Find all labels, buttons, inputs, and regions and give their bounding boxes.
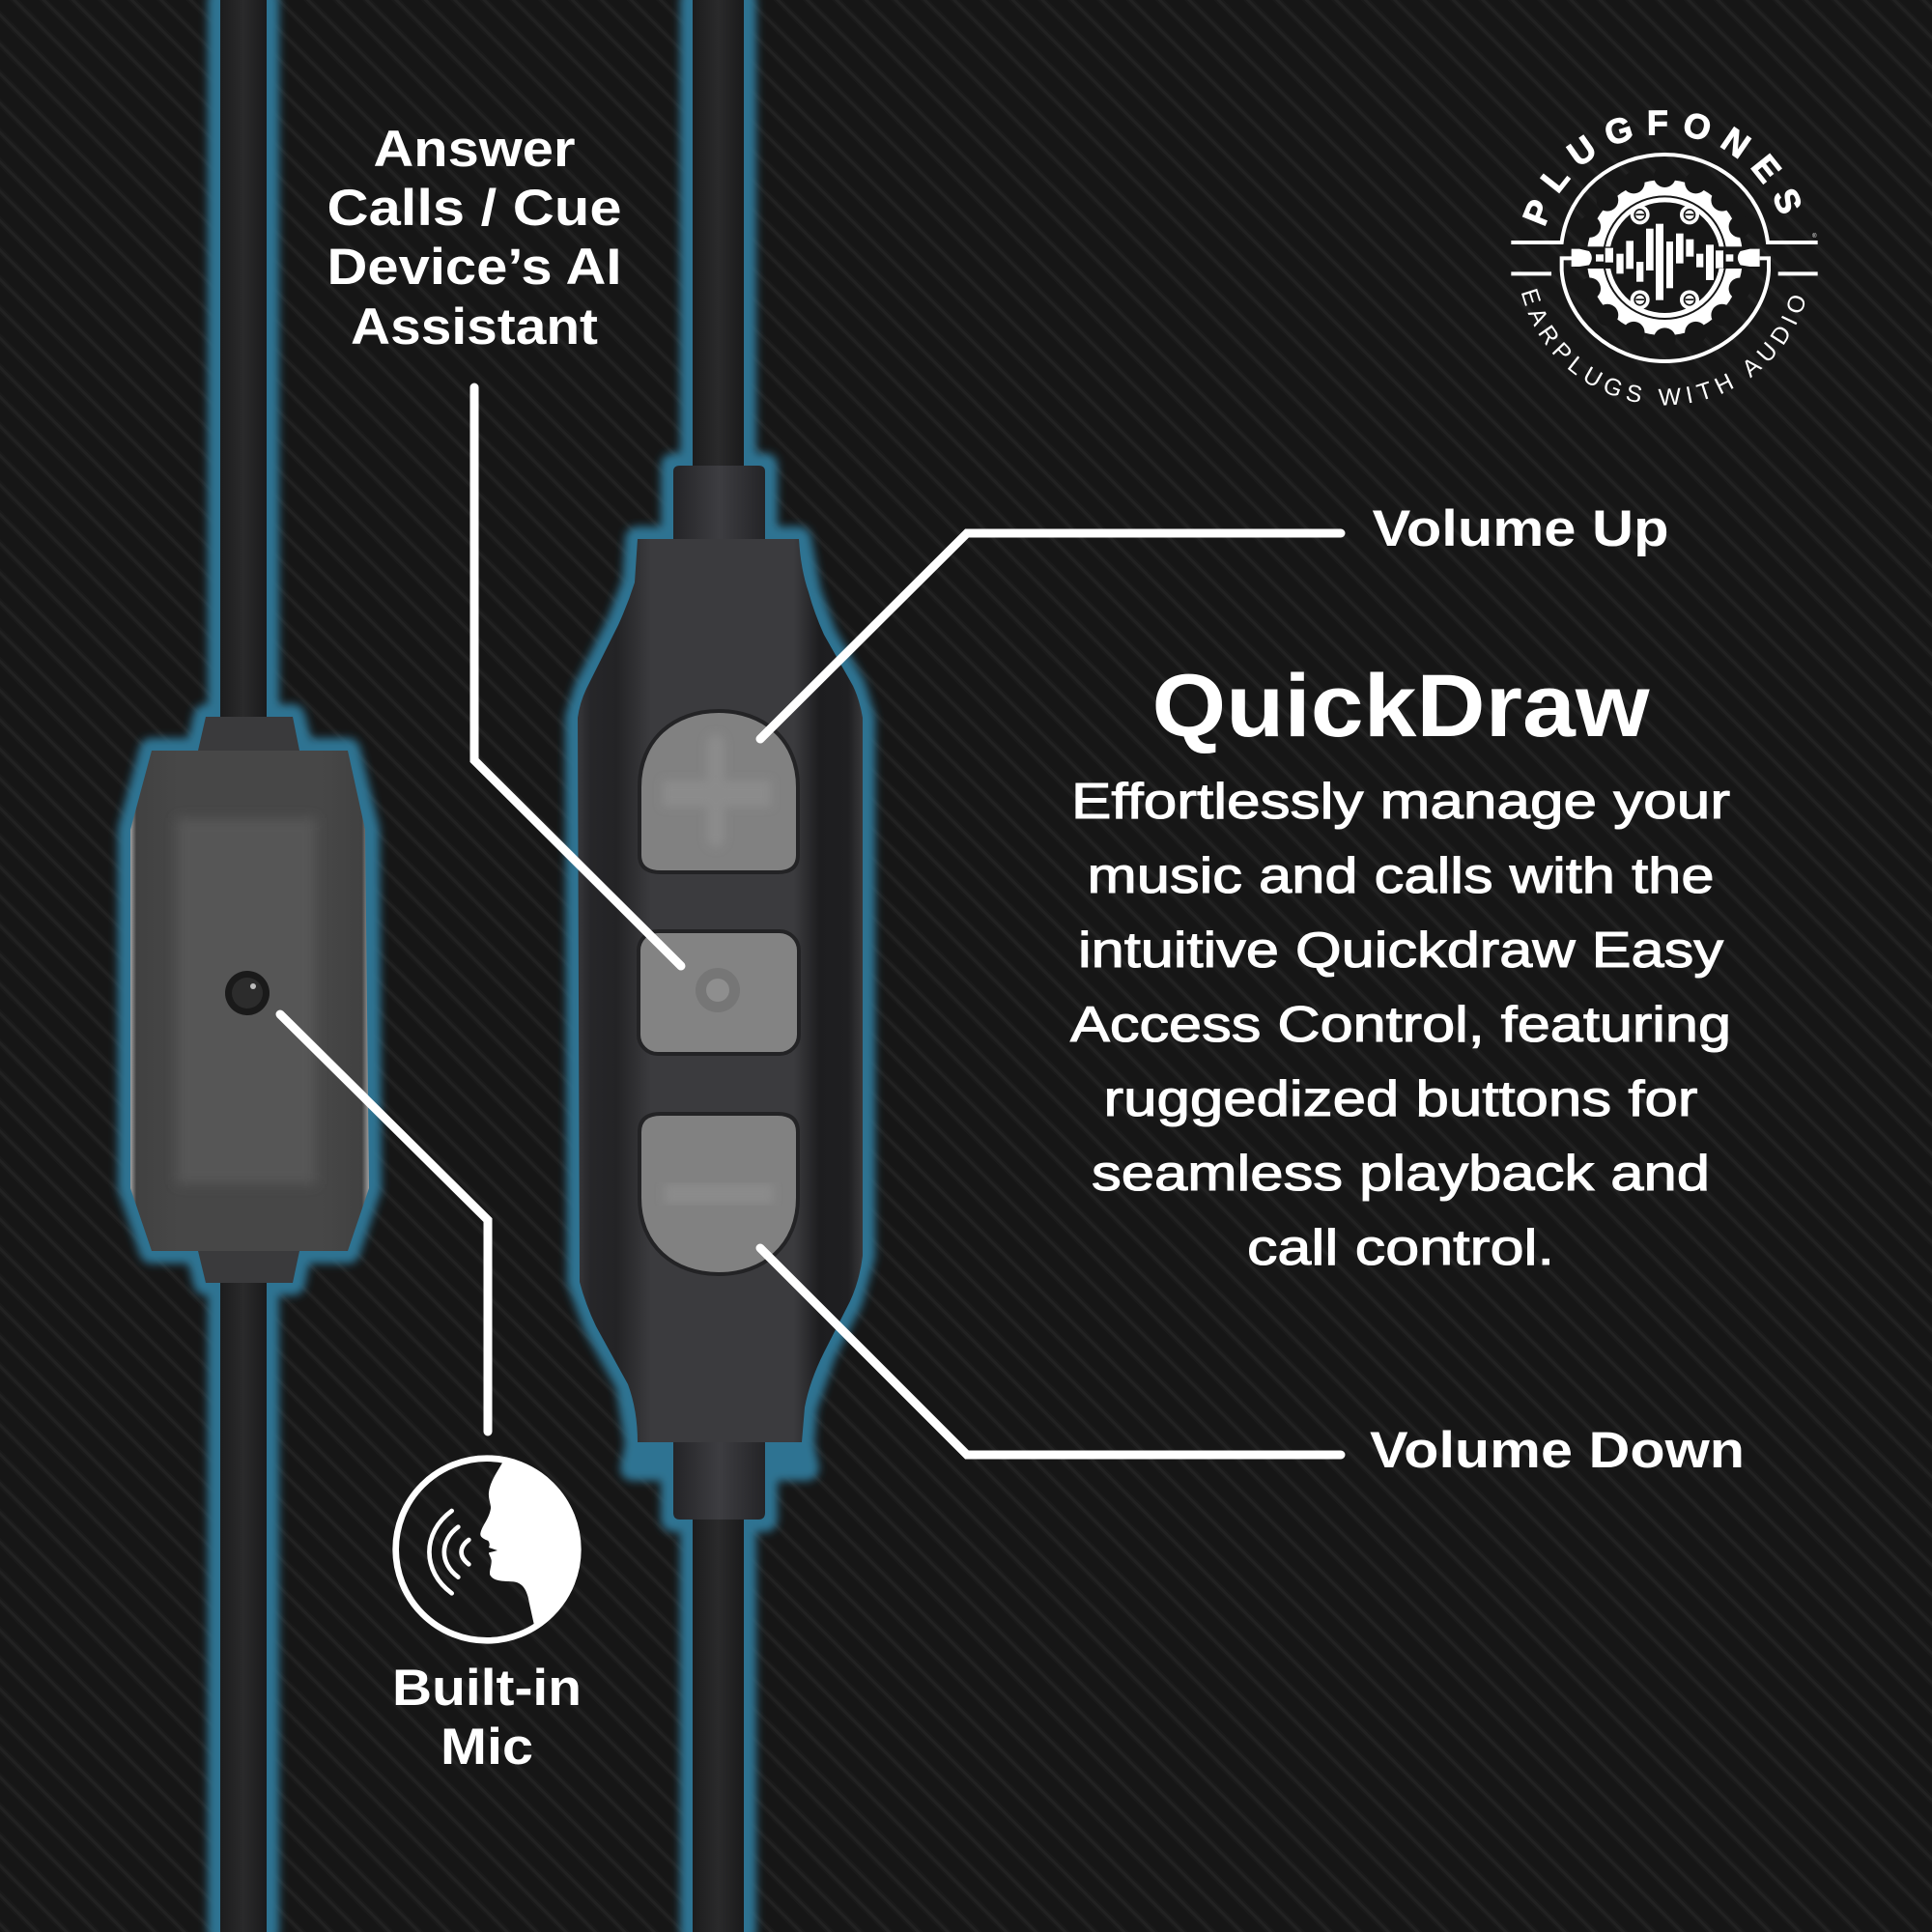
logo: Plugfones badge	[1511, 110, 1818, 406]
body text: intuitive Quickdraw Easy	[1078, 923, 1723, 979]
label: built-in mic	[392, 1660, 582, 1776]
control necks	[673, 466, 765, 1520]
callout line: answer	[474, 387, 681, 966]
body text: ruggedized buttons for	[1103, 1071, 1698, 1127]
control glow	[578, 0, 863, 1932]
callout line: volume up	[760, 533, 1341, 739]
body text: call control.	[1247, 1220, 1554, 1276]
logo tagline: EARPLUGS WITH AUDIO	[1521, 288, 1804, 406]
right cable with QuickDraw control unit	[578, 0, 863, 1932]
logo frame	[1511, 155, 1818, 361]
body text: Effortlessly manage your	[1071, 774, 1730, 830]
body text: Access Control, featuring	[1070, 997, 1731, 1053]
heading: QuickDraw: QuickDraw	[1151, 657, 1650, 755]
label: volume down: Volume Down	[1370, 1422, 1745, 1479]
mic unit glow	[130, 0, 369, 1932]
control body	[578, 539, 863, 1442]
left cable	[220, 0, 267, 1932]
logo registered mark: ®	[1812, 233, 1817, 240]
microphone hole	[225, 971, 270, 1015]
callout line: built-in mic	[280, 1014, 488, 1432]
label: built-in mic: Built-in	[392, 1660, 582, 1717]
logo waveform	[1596, 224, 1733, 300]
volume up button	[639, 711, 798, 872]
label: built-in mic: Mic	[440, 1719, 533, 1776]
logo screws	[1635, 211, 1694, 304]
volume down button	[639, 1114, 798, 1274]
logo plugs	[1572, 249, 1760, 267]
label: answer calls	[327, 121, 622, 355]
label: answer calls: Answer	[373, 121, 576, 178]
body text: seamless playback and	[1092, 1146, 1710, 1202]
body text	[1070, 774, 1731, 1276]
answer button	[639, 931, 799, 1054]
body text: music and calls with the	[1088, 848, 1714, 904]
left cable with mic unit	[130, 0, 369, 1932]
right cable	[693, 0, 744, 468]
logo wordmark: PLUGFONES	[1522, 110, 1801, 226]
label: answer calls: Device’s AI	[327, 239, 622, 296]
logo gear	[1573, 165, 1757, 350]
label: volume up: Volume Up	[1372, 500, 1669, 557]
label: answer calls: Calls / Cue	[327, 180, 622, 237]
icon: speaking head	[396, 1459, 578, 1640]
callout line: volume down	[760, 1248, 1341, 1455]
mic unit body	[130, 717, 369, 1283]
label: answer calls: Assistant	[351, 298, 598, 355]
